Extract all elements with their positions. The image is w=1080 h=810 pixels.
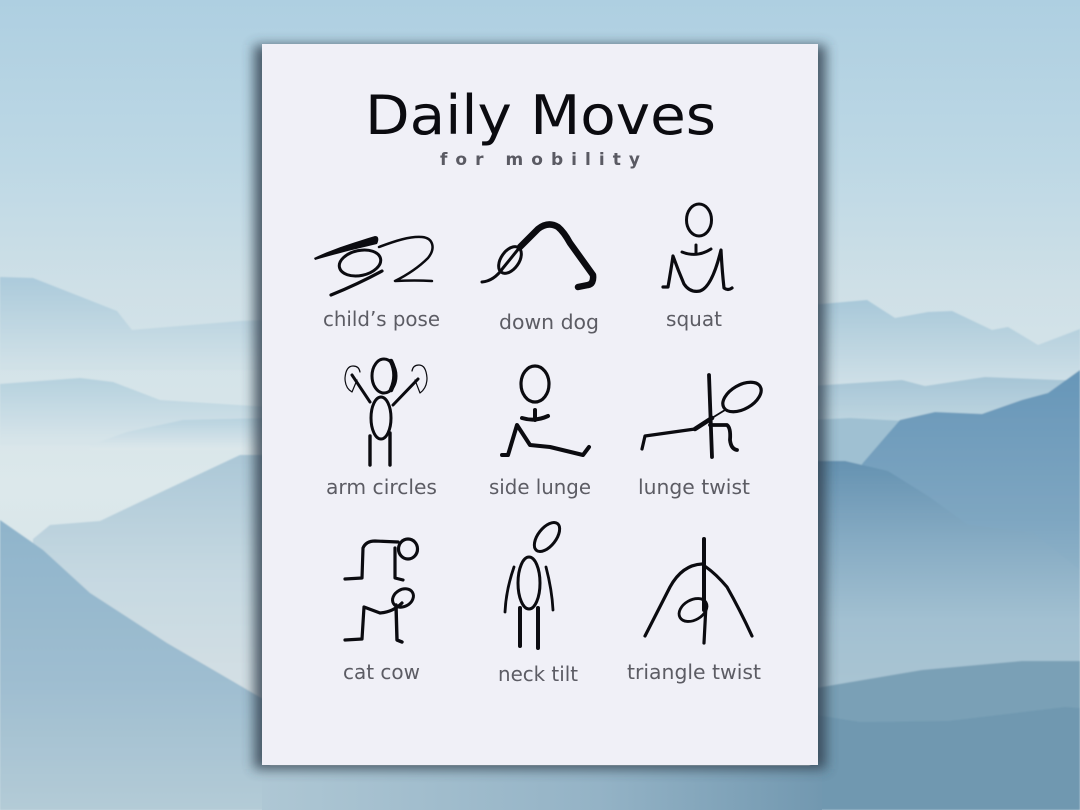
figure: cat cow: [345, 539, 418, 642]
title: Daily Moves: [365, 84, 716, 147]
label: cat cow: [343, 660, 420, 684]
label: child’s pose: [323, 307, 440, 331]
exercise: cat cow: [343, 539, 420, 684]
figure: triangle twist: [645, 539, 752, 643]
label: lunge twist: [638, 475, 750, 499]
figure: side lunge: [502, 366, 589, 455]
exercise: child's pose: [314, 236, 440, 331]
label: triangle twist: [627, 660, 761, 684]
figure: neck tilt: [505, 518, 565, 648]
figure: child's pose: [314, 236, 433, 295]
exercise: lunge twist: [638, 375, 766, 499]
exercise: neck tilt: [498, 518, 578, 686]
label: neck tilt: [498, 662, 578, 686]
exercise: down dog: [482, 224, 599, 334]
label: side lunge: [489, 475, 591, 499]
figure: squat: [663, 204, 732, 291]
label: squat: [666, 307, 722, 331]
exercise: triangle twist: [627, 539, 761, 684]
label: arm circles: [326, 475, 437, 499]
figure: down dog: [482, 224, 593, 287]
panel shadow: [254, 45, 826, 769]
poster panel: [262, 44, 818, 765]
exercise: side lunge: [489, 366, 591, 499]
label: down dog: [499, 310, 599, 334]
figure: arm circles: [345, 359, 427, 465]
exercise: squat: [663, 204, 732, 331]
exercise: arm circles: [326, 359, 437, 499]
figure: lunge twist: [642, 375, 766, 457]
subtitle: for mobility: [440, 150, 640, 170]
